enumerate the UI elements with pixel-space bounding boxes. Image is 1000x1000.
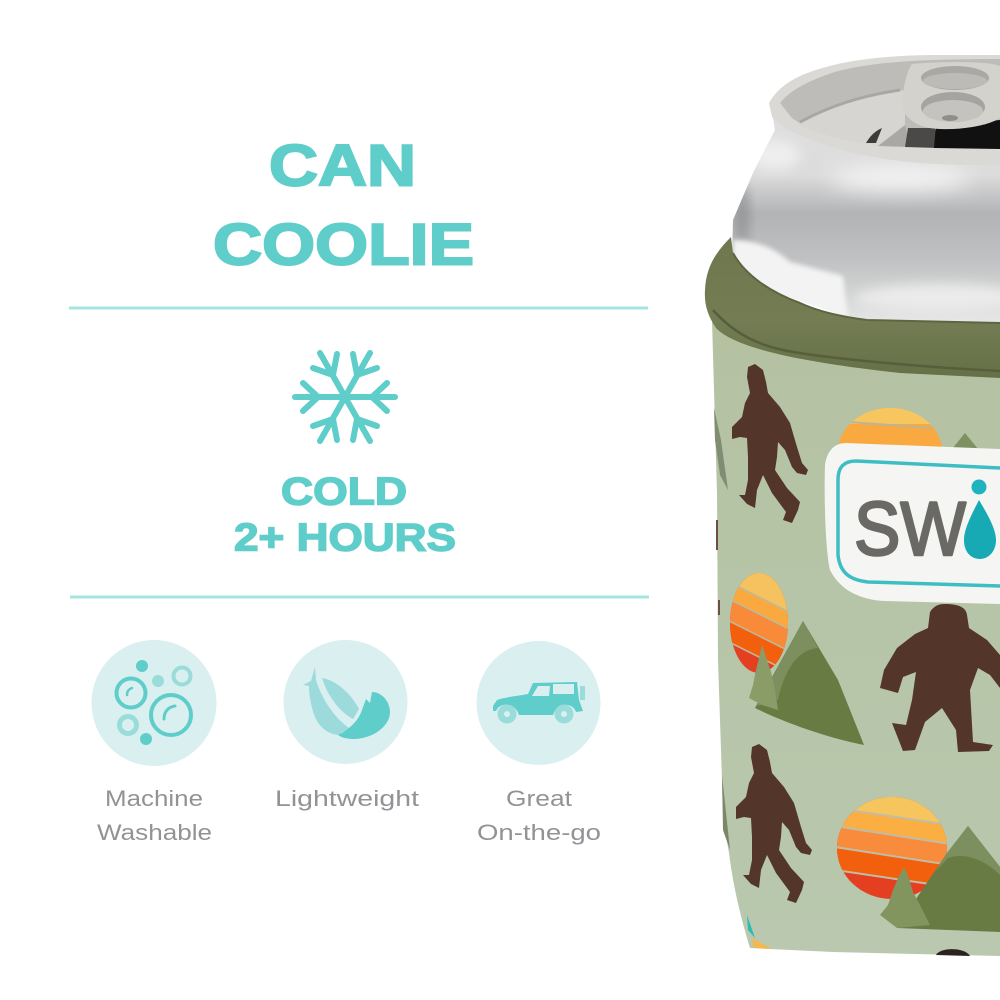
coolie collar	[705, 237, 1000, 378]
pattern: sun one	[838, 408, 942, 447]
product photo: can in coolie	[705, 55, 1000, 956]
can top	[769, 55, 1000, 165]
icon: jeep	[476, 641, 600, 765]
feature: lightweight	[275, 640, 419, 811]
title	[213, 134, 474, 278]
pattern: bigfoot three	[880, 604, 1000, 752]
label: machine washable: Washable	[97, 820, 212, 845]
heading: cold 2+ hours: COLD	[281, 470, 407, 514]
can body	[725, 110, 1000, 326]
icon: bubbles	[92, 640, 216, 766]
label: lightweight: Lightweight	[275, 786, 419, 811]
pattern: bigfoot one	[732, 364, 808, 523]
label: machine washable: Machine	[105, 786, 203, 811]
edge marks	[714, 408, 970, 956]
coolie body	[712, 320, 1000, 956]
pull tab	[902, 62, 1000, 129]
title: CAN	[269, 134, 416, 198]
feature: great on-the-go	[476, 641, 601, 845]
label: great on-the-go	[477, 786, 601, 845]
pattern: mountain and tree three	[880, 826, 1000, 932]
heading: cold 2+ hours	[234, 470, 456, 560]
badge: swig logo: SW	[854, 487, 966, 572]
label: machine washable	[97, 786, 212, 845]
feature: machine washable	[92, 640, 216, 845]
label: great on-the-go: On-the-go	[477, 820, 601, 845]
title: COOLIE	[213, 212, 474, 278]
badge: swig logo	[825, 443, 1000, 604]
heading: cold 2+ hours: 2+ HOURS	[234, 516, 456, 560]
pattern: sun three	[837, 797, 947, 899]
icon: snowflake	[295, 353, 395, 441]
pattern: sun two	[730, 573, 788, 672]
label: great on-the-go: Great	[506, 786, 572, 811]
icon: feather	[284, 640, 408, 764]
pattern: small peak	[952, 433, 978, 449]
pattern: bigfoot two	[736, 744, 812, 903]
pattern: mountains and tree	[749, 621, 864, 745]
